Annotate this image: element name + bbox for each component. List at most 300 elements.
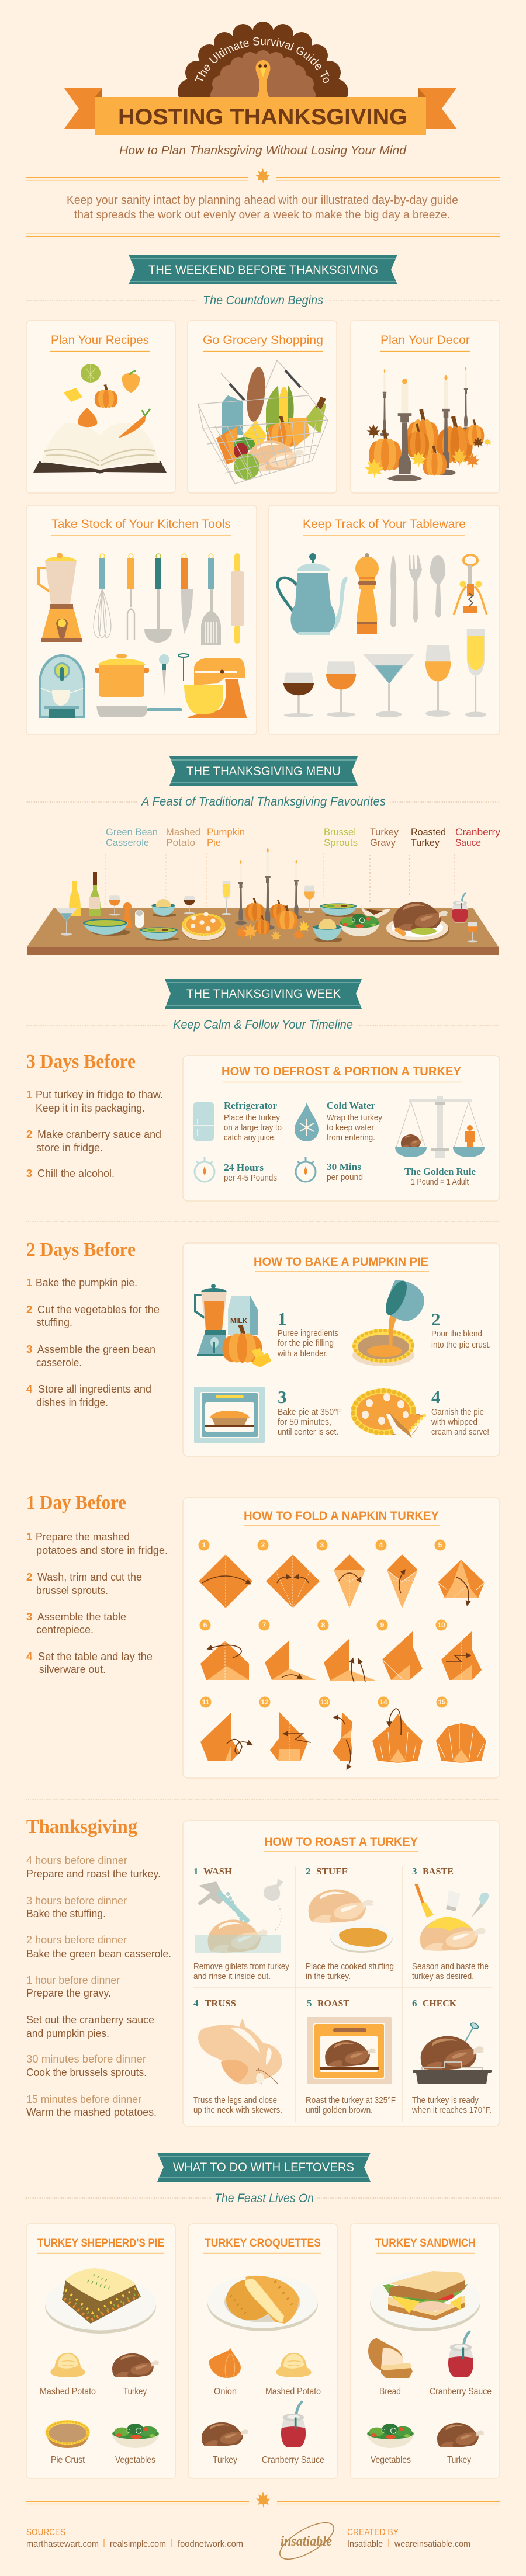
icon: falling vegetables [63,364,150,438]
timeline for the day: 2 hours before dinner [26,1933,127,1946]
label: cranberry sauce: Sauce [455,837,481,848]
step 1: wash: 1 [193,1866,199,1877]
timeline for the day [26,1854,171,2118]
candle centrepiece [235,848,310,942]
text: 24 hours: 24 Hours [224,1162,264,1173]
fold step numbers: 9 [380,1621,385,1629]
brussel sprouts serving bowl [320,903,358,917]
step 3 text: Bake pie at 350°F [278,1408,342,1417]
checklist: 1 day before: silverware out. [39,1663,106,1675]
green bean casserole [83,919,130,936]
main title ribbon: HOSTING THANKSGIVING [118,105,407,130]
step 1 text: with a blender. [277,1349,328,1359]
ingredient: turkey: Turkey [213,2455,237,2465]
icon: wine glass, orange [326,661,356,717]
fold step numbers: 13 [320,1698,328,1706]
step 3 text: 3 [278,1387,286,1407]
label: brussel sprouts: Brussel [324,827,356,838]
section subtitle: the feast lives on: The Feast Lives On [214,2192,314,2205]
fold 5 [438,1560,485,1603]
logo: insatiable [275,2516,339,2566]
illustration: blender, milk, pumpkin and butter [195,1284,271,1367]
fold 6 [200,1641,249,1680]
ingredient: mashed potato: Mashed Potato [265,2387,321,2397]
step 6: check [411,1998,492,2115]
checklist: 2 days before: 4 [26,1383,33,1395]
panel: take stock of your kitchen tools: Take Stock of Your Kitchen Tools [51,518,231,531]
ingredient: vegetables [367,2424,414,2465]
icon: frying pan [96,706,182,717]
section banner: the thanksgiving menu: THE THANKSGIVING MENU [186,765,341,778]
fold step numbers: 2 [261,1541,265,1549]
bottles and drinks left [56,872,120,936]
illustration: pie in oven [194,1387,265,1443]
fold 10 [441,1631,482,1680]
section subtitle: the countdown begins: The Countdown Begins [203,294,323,307]
icon: stand mixer [184,658,247,718]
intro paragraph: that spreads the work out evenly over a week to make the big day a breeze. [74,209,450,221]
mashed potato bowl [151,899,177,917]
icon: champagne flute [465,629,486,717]
checklist: 3 days before: store in fridge. [36,1141,103,1154]
section banner: what to do with leftovers: WHAT TO DO WITH LEFTOVERS [173,2161,354,2174]
step 5: roast [306,1998,396,2115]
ingredient: vegetables: Vegetables [115,2455,155,2465]
plate of croquettes [207,2275,318,2331]
step 4 text: Garnish the pie [431,1408,484,1417]
fold step numbers [199,1540,448,1708]
section subtitle: keep calm: Keep Calm & Follow Your Timeline [173,1018,353,1032]
checklist: 3 days before [26,1088,163,1179]
logo: insatiable: insatiable [281,2534,332,2549]
panel: go grocery shopping: Go Grocery Shopping [203,334,323,347]
step 3: baste: BASTE [423,1866,454,1877]
illustration: pouring blend into crust [352,1278,424,1366]
step 4: truss: up the neck with skewers. [193,2106,282,2115]
step 2 text: 2 [431,1309,441,1329]
label: roasted turkey [411,827,446,848]
fold 15 [436,1723,486,1763]
illustration: garnished pie with slice [351,1388,424,1438]
fold 9 [382,1631,423,1680]
footer: created by: CREATED BY [347,2528,399,2537]
roasted turkey platter [386,902,449,942]
step 4: truss: 4 [193,1998,199,2009]
step 1 text [277,1308,338,1359]
fold step numbers: 11 [202,1698,210,1706]
step 2: stuff [306,1866,394,1981]
pumpkin pie [182,912,226,941]
panel: how to defrost and portion a turkey [183,1056,500,1201]
step 2: stuff: in the turkey. [306,1972,351,1981]
text: cold water: Cold Water [327,1100,375,1111]
panel: turkey shepherd's pie [26,2224,175,2478]
step 1: wash [193,1866,290,1981]
icon: turkey baster [159,654,169,696]
icon: stopwatch 30 mins [296,1157,316,1182]
footer: created by [347,2528,470,2549]
step 1: wash: Remove giblets from turkey [193,1962,290,1971]
icon: ladle [144,554,172,643]
fold 14 [372,1709,423,1763]
intro paragraph: Keep your sanity intact by planning ahead with our illustrated day-by-day guide [67,194,458,207]
icon: corkscrew [454,555,487,615]
step 6: check: when it reaches 170°F. [411,2106,492,2115]
text: 30 mins [327,1161,363,1182]
fold 8 [324,1639,376,1682]
text: refrigerator [224,1100,282,1143]
ingredient: onion: Onion [214,2387,237,2397]
icon: balance scale with turkey and person [395,1096,485,1158]
label: green bean casserole [106,827,158,848]
text: refrigerator: on a large tray to [224,1123,282,1133]
checklist: 2 days before: stuffing. [36,1316,72,1328]
heading: thanksgiving: Thanksgiving [26,1816,137,1838]
footer divider with maple leaf [26,2492,500,2508]
section banner: the weekend before thanksgiving [129,255,397,284]
text: the golden rule: The Golden Rule [404,1166,476,1177]
step 2 text [431,1309,491,1350]
checklist: 1 day before: 1 [26,1530,32,1543]
checklist: 2 days before: casserole. [36,1356,82,1369]
fold step numbers: 1 [202,1541,206,1549]
label: mashed potato: Mashed [166,827,200,838]
ingredient: mashed potato [265,2353,321,2397]
checklist: 1 day before: Wash, trim and cut the [37,1571,142,1583]
icon: water drop with snowflake [295,1102,319,1141]
text: refrigerator: Refrigerator [224,1100,277,1111]
main title ribbon [64,88,456,135]
timeline for the day: Warm the mashed potatoes. [26,2106,157,2118]
panel: go grocery shopping [188,321,337,493]
menu labels [106,827,500,848]
step 5: roast: until golden brown. [306,2106,373,2115]
illustration: blender, milk, pumpkin and butter: MILK [230,1317,248,1325]
icon: cooking pot [95,654,149,697]
ingredient: bread [368,2338,413,2397]
label: green bean casserole: Casserole [106,837,149,848]
checklist: 2 days before: Assemble the green bean [37,1343,155,1355]
step 2: stuff: 2 [306,1866,311,1877]
step 6: check: 6 [412,1998,417,2009]
red wine glass [184,896,195,914]
label: pumpkin pie: Pie [207,837,221,848]
ingredient: turkey: Turkey [447,2455,471,2465]
label: pumpkin pie [207,827,245,848]
timeline for the day: Set out the cranberry sauce [26,2013,154,2026]
icon: spatula [201,554,221,645]
icon: brandy glass [283,673,314,717]
ingredient: bread: Bread [379,2387,401,2397]
icon: refrigerator [193,1102,214,1141]
text: the golden rule [404,1166,476,1187]
fold step numbers: 6 [203,1621,207,1629]
panel: plan your decor: Plan Your Decor [380,334,470,347]
label: roasted turkey: Turkey [411,837,440,848]
panel: plan your decor [351,321,500,493]
checklist: 1 day before: Prepare the mashed [36,1530,130,1543]
text: refrigerator: catch any juice. [224,1133,276,1143]
step 4 text: 4 [431,1387,441,1407]
step 4: truss [193,1998,282,2115]
step 1 text: Puree ingredients [278,1329,338,1338]
ingredient: turkey: Turkey [123,2387,147,2397]
footer: sources [26,2528,243,2549]
plate with sandwich [370,2271,480,2331]
checklist: 2 days before: Cut the vegetables for the [37,1303,160,1315]
step 1: wash: WASH [203,1866,232,1877]
label: turkey gravy: Turkey [370,827,399,838]
footer: created by: Insatiable [347,2539,383,2549]
step 3: baste: 3 [412,1866,417,1877]
label: roasted turkey: Roasted [411,827,446,838]
champagne flute [222,881,231,915]
step 1 text: 1 [278,1308,286,1329]
checklist: 1 day before [26,1530,168,1675]
step 4: truss: TRUSS [205,1998,236,2009]
footer: sources: foodnetwork.com [178,2539,243,2549]
checklist: 1 day before: centrepiece. [36,1623,94,1636]
timeline for the day: 3 hours before dinner [26,1894,127,1907]
timeline for the day: Bake the green bean casserole. [26,1947,171,1960]
fold 3 [334,1554,365,1608]
illustration: thanksgiving table [27,848,499,955]
step 4: truss: Truss the legs and close [193,2096,277,2105]
step 1: wash: and rinse it inside out. [193,1972,271,1981]
ingredient: mashed potato: Mashed Potato [40,2387,96,2397]
divider with maple leaf [26,168,500,184]
panel: how to roast a turkey: HOW TO ROAST A TURKEY [264,1835,418,1849]
ingredient: turkey [437,2423,484,2465]
checklist: 3 days before: 2 [26,1128,32,1140]
fold 13 [333,1712,352,1768]
icon: open recipe book [33,423,167,473]
text: cold water: to keep water [327,1123,374,1133]
label: brussel sprouts [324,827,358,848]
timeline for the day: Prepare the gravy. [26,1987,111,1999]
checklist: 3 days before: 1 [26,1088,32,1100]
label: mashed potato: Potato [166,837,195,848]
panel: how to roast a turkey [183,1821,500,2126]
section banner: the thanksgiving menu [169,756,358,786]
fold step numbers: 8 [321,1621,326,1629]
icon: cutlery [390,555,445,627]
white wine glass [304,886,315,913]
label: green bean casserole: Green Bean [106,827,158,838]
text: 30 mins: 30 Mins [327,1161,361,1172]
wine glass front [467,922,478,942]
footer: sources: SOURCES [26,2528,65,2537]
step 6: check: The turkey is ready [412,2096,479,2105]
section banner: the thanksgiving week: THE THANKSGIVING WEEK [186,987,341,1001]
text: cold water: Wrap the turkey [327,1113,383,1123]
icon: white wine glass [425,645,451,717]
section subtitle: a feast: A Feast of Traditional Thanksgiving Favourites [140,795,386,808]
step 4 text [431,1387,489,1437]
text: cold water [327,1100,383,1143]
timeline for the day: 15 minutes before dinner [26,2093,141,2105]
panel: plan your recipes: Plan Your Recipes [51,334,149,347]
panel: plan your recipes [26,321,175,493]
step 4 text: with whipped [431,1418,477,1427]
step 2: stuff: STUFF [316,1866,348,1877]
ingredient: vegetables [112,2424,159,2465]
panel: how to fold a napkin turkey [183,1498,500,1778]
heading: 2 days before: 2 Days Before [26,1239,136,1261]
panel: keep track of your tableware: Keep Track of Your Tableware [303,518,466,531]
step 5: roast: 5 [307,1998,312,2009]
gravy boat [361,905,390,918]
fold 7 [265,1640,316,1680]
checklist: 2 days before: 1 [26,1276,32,1289]
heading: 3 days before: 3 Days Before [26,1051,136,1072]
icon: meat thermometer [178,654,189,681]
ingredient: cranberry sauce [430,2331,492,2397]
timeline for the day: 1 hour before dinner [26,1974,120,1986]
section banner: the thanksgiving week [165,979,362,1009]
icon: coffee pot [278,553,348,635]
panel: turkey croquettes: TURKEY CROQUETTES [205,2237,321,2249]
heading: 1 day before: 1 Day Before [26,1492,126,1513]
checklist: 3 days before: Put turkey in fridge to thaw. [36,1088,163,1100]
checklist: 3 days before: Chill the alcohol. [37,1167,115,1179]
checklist: 3 days before: Make cranberry sauce and [37,1128,161,1140]
timeline for the day: Prepare and roast the turkey. [26,1867,161,1880]
section banner: the weekend before thanksgiving: THE WEEKEND BEFORE THANKSGIVING [148,263,378,277]
checklist: 2 days before [26,1276,160,1408]
label: mashed potato [166,827,200,848]
panel: turkey croquettes [189,2224,337,2478]
table [27,908,499,955]
timeline for the day: 4 hours before dinner [26,1854,127,1866]
checklist: 1 day before: Set the table and lay the [38,1650,153,1662]
footer: created by: weareinsatiable.com [394,2539,470,2549]
mixed salad [339,914,380,936]
fold step numbers: 7 [262,1621,267,1629]
text: the golden rule: 1 Pound = 1 Adult [411,1178,469,1187]
fold 11 [200,1713,250,1761]
icon: coffee maker [39,654,85,718]
panel: how to bake a pumpkin pie [183,1243,500,1456]
panel: turkey sandwich: TURKEY SANDWICH [375,2237,476,2249]
text: 24 hours [224,1162,277,1183]
panel: keep track of your tableware [269,505,500,735]
step 2: stuff: Place the cooked stuffing [306,1962,394,1971]
checklist: 1 day before: brussel sprouts. [36,1584,108,1596]
text: refrigerator: Place the turkey [224,1113,281,1123]
icon: blender [39,553,82,642]
checklist: 1 day before: 2 [26,1571,32,1583]
step 3 text: for 50 minutes, [278,1418,331,1427]
mashed potato bowl front [313,919,343,942]
icon: turkey with fan of feathers [178,22,348,97]
step 3 text [278,1387,342,1437]
panel: how to defrost and portion a turkey: HOW TO DEFROST & PORTION A TURKEY [222,1064,461,1078]
fold step numbers: 4 [379,1541,383,1549]
icon: grocery basket [198,360,328,484]
timeline for the day: Bake the stuffing. [26,1907,106,1919]
timeline for the day: 30 minutes before dinner [26,2053,146,2065]
label: pumpkin pie: Pumpkin [207,827,245,838]
ingredient: cranberry sauce [262,2401,324,2465]
illustration: candles, pumpkins and leaves [364,367,492,481]
fold 2 [266,1554,320,1608]
step 5: roast: Roast the turkey at 325°F [306,2096,396,2105]
panel: how to fold a napkin turkey: HOW TO FOLD A NAPKIN TURKEY [244,1509,439,1523]
step 6: check: CHECK [423,1998,457,2009]
checklist: 1 day before: Assemble the table [37,1610,126,1623]
intro paragraph [67,194,458,221]
icon: pepper mill [355,553,379,634]
step 2 text: into the pie crust. [431,1341,491,1350]
fold step numbers: 14 [379,1698,387,1706]
checklist: 2 days before: Store all ingredients and [38,1383,151,1395]
panel: how to bake a pumpkin pie: HOW TO BAKE A PUMPKIN PIE [254,1255,428,1269]
timeline for the day: and pumpkin pies. [26,2027,109,2039]
fold 4 [387,1554,418,1608]
checklist: 3 days before: 3 [26,1167,32,1179]
checklist: 2 days before: 2 [26,1303,32,1315]
fold step numbers: 15 [438,1698,446,1706]
ingredient: turkey [202,2422,248,2465]
subtitle: How to Plan Thanksgiving Without Losing Your Mind [119,144,407,157]
brussel sprouts bowl [140,927,179,941]
pepper mill and salt [123,902,144,928]
step 3: baste [412,1866,489,1981]
label: turkey gravy: Gravy [370,837,396,848]
icon: chef knife [181,554,193,634]
fold step numbers: 5 [438,1541,442,1549]
icon: carving fork [127,554,134,640]
footer: sources: realsimple.com [110,2539,166,2549]
ingredient: pie crust [46,2420,90,2465]
step 3: baste: turkey as desired. [412,1972,474,1981]
step 3 text: until center is set. [278,1428,338,1437]
timeline for the day: Cook the brussels sprouts. [26,2066,147,2078]
curved heading: The Ultimate Survival Guide To [195,37,330,83]
ingredient: turkey [112,2353,159,2397]
label: brussel sprouts: Sprouts [324,837,358,848]
header [26,22,500,237]
icon: rolling pin [231,553,244,644]
checklist: 2 days before: dishes in fridge. [36,1396,108,1408]
ingredient: cranberry sauce: Cranberry Sauce [262,2455,324,2465]
step 1 text: for the pie filling [278,1339,334,1348]
cranberry sauce jar [452,893,468,922]
icon: martini glass [363,654,414,717]
step 3: baste: Season and baste the [412,1962,489,1971]
ingredient: onion [209,2348,241,2397]
ingredient: mashed potato [40,2353,96,2397]
ingredient: vegetables: Vegetables [371,2455,411,2465]
panel: turkey sandwich [351,2224,500,2478]
fold step numbers: 12 [261,1698,269,1706]
checklist: 2 days before: 3 [26,1343,32,1355]
text: 24 hours: per 4-5 Pounds [224,1174,277,1183]
ingredient: cranberry sauce: Cranberry Sauce [430,2387,492,2397]
checklist: 1 day before: 3 [26,1610,32,1623]
fold step numbers: 10 [437,1621,445,1629]
label: cranberry sauce [455,827,500,848]
step 4 text: cream and serve! [431,1428,489,1437]
label: turkey gravy [370,827,399,848]
checklist: 1 day before: 4 [26,1650,33,1662]
footer: sources: marthastewart.com [26,2539,99,2549]
panel: turkey shepherd's pie: TURKEY SHEPHERD'S PIE [37,2237,164,2249]
icon: stopwatch 24 hours [195,1157,214,1182]
fold 1 [199,1554,252,1608]
text: cold water: from entering. [327,1133,375,1143]
